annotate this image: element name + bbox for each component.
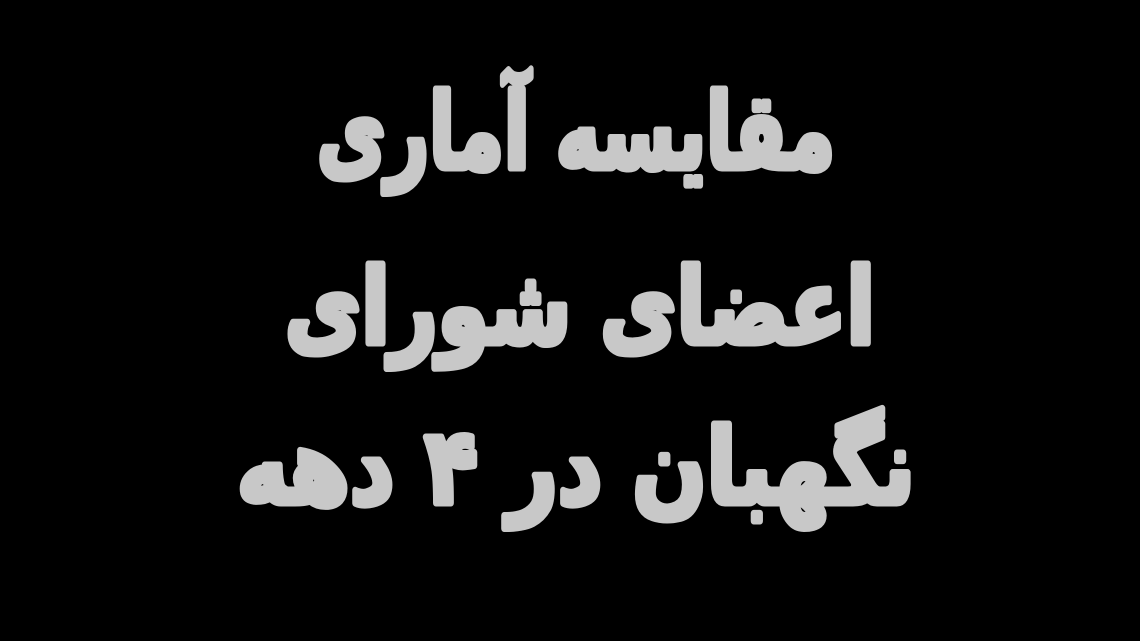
title line 2: اعضای شورای — [285, 246, 875, 368]
title line 1: مقایسه آماری — [317, 68, 835, 193]
title line 3: نگهبان در ۴ دهه — [237, 406, 915, 528]
